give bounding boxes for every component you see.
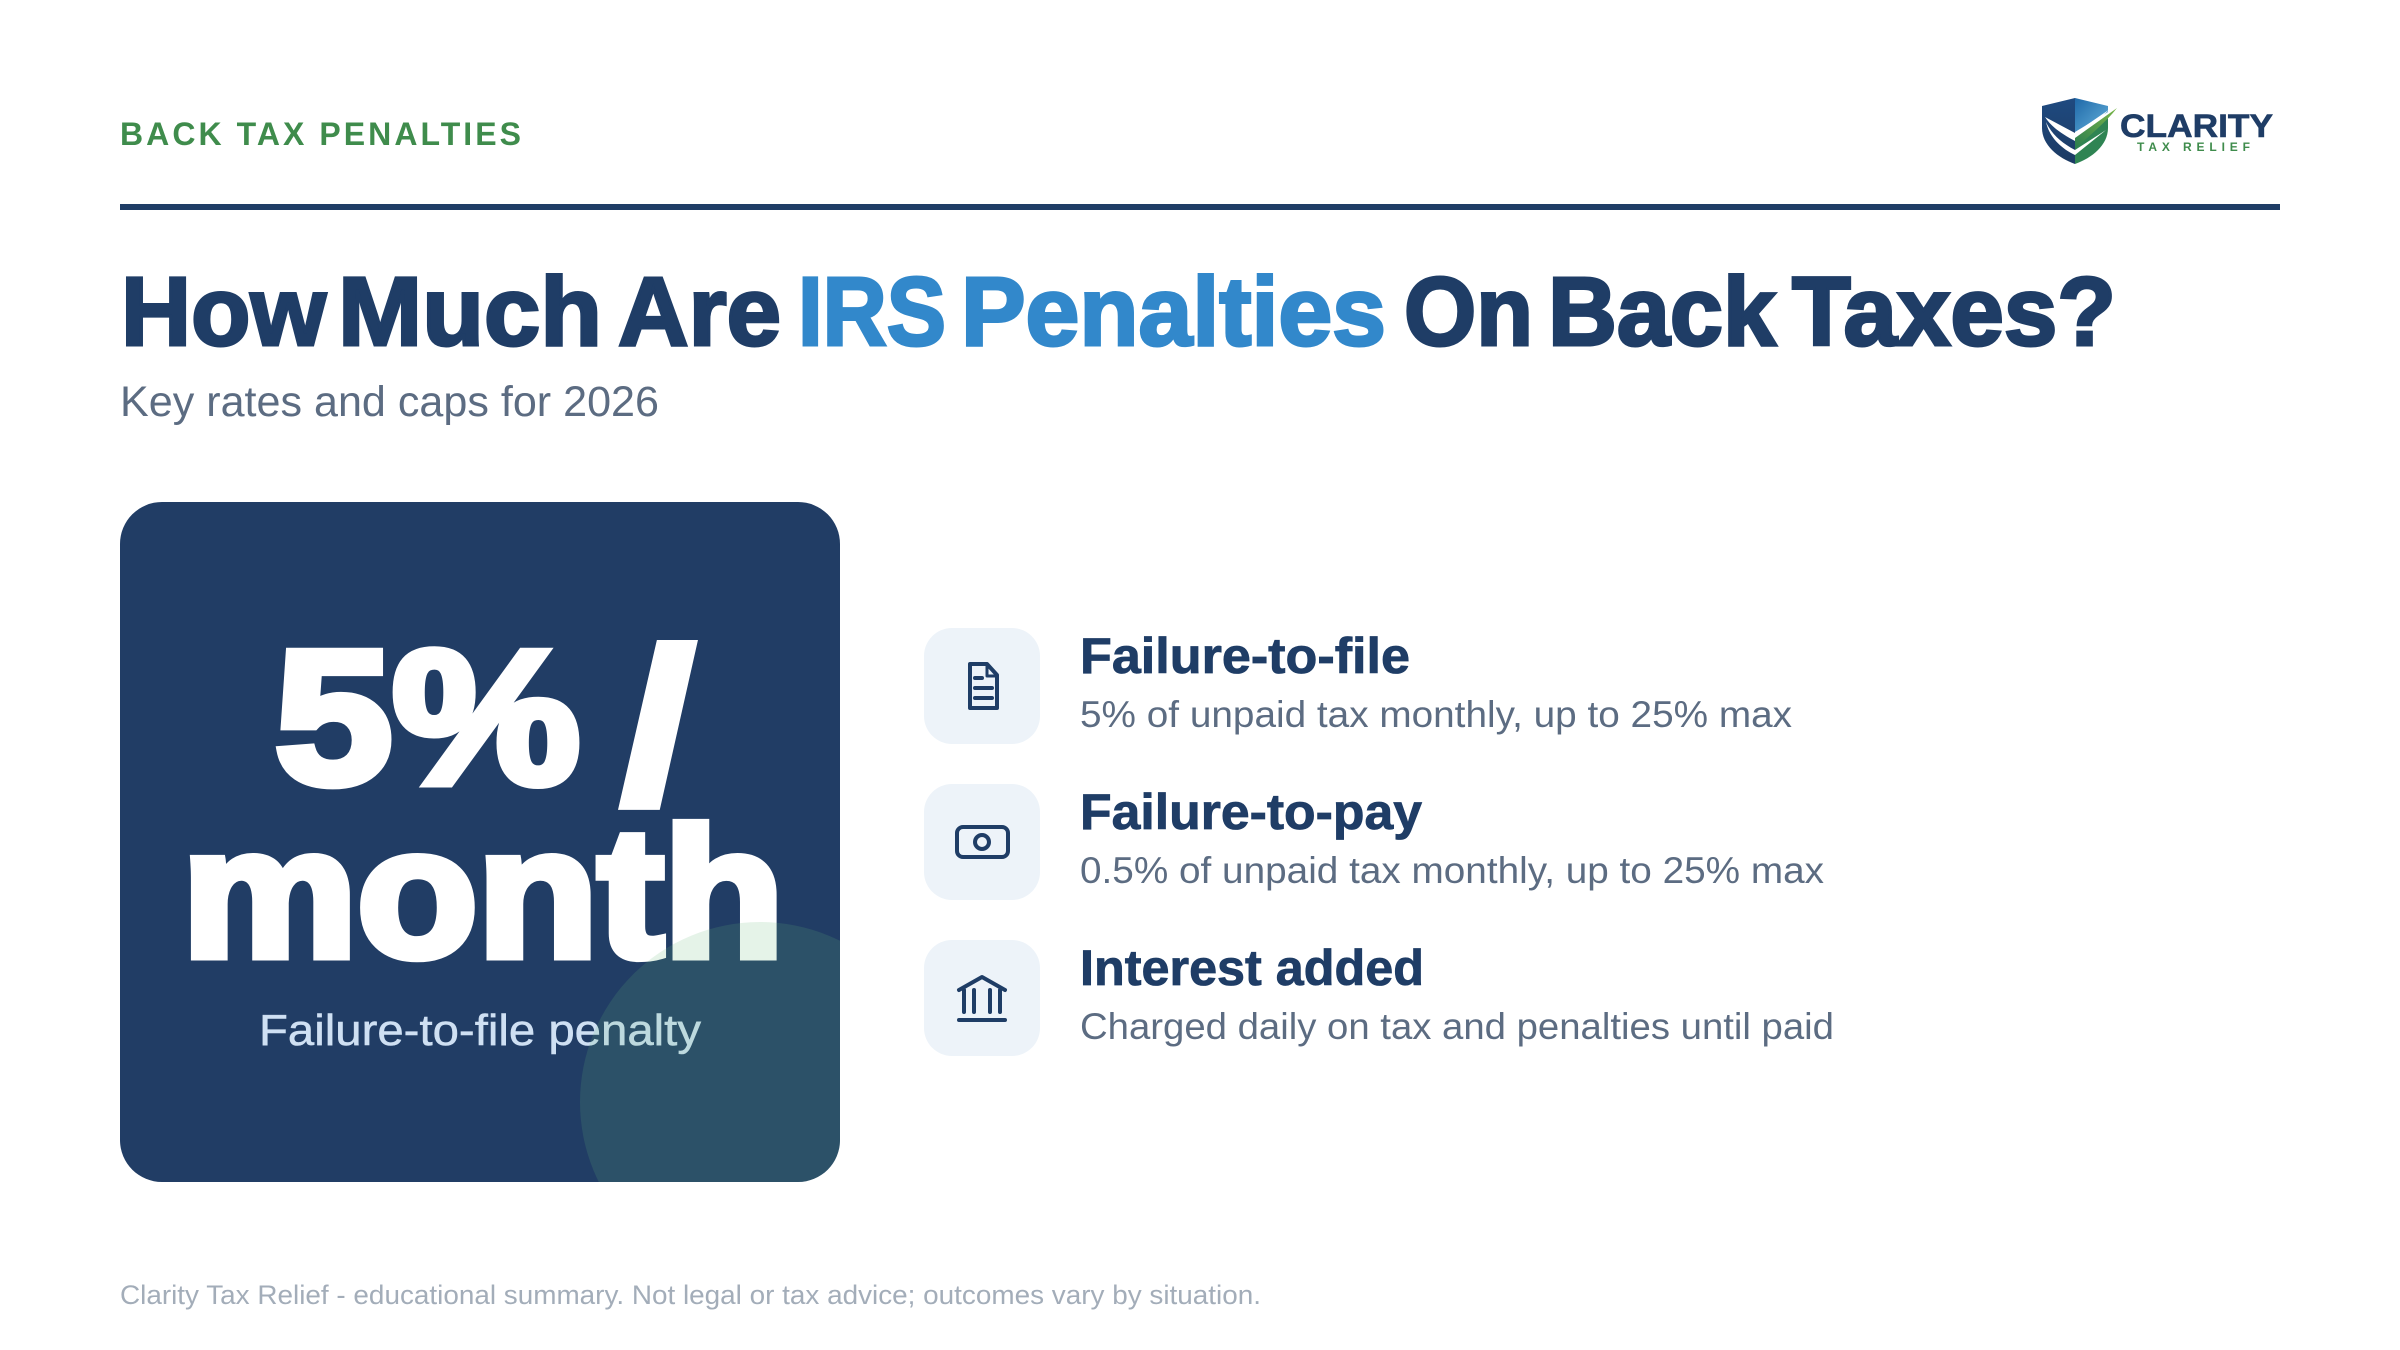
icon: document [924,628,1040,744]
icon: shield [2042,98,2117,164]
title: Taxes? [1792,257,2116,366]
icon: banknote [924,784,1040,900]
big stat: 5% / month [182,605,784,995]
caption: Failure-to-file penalty [259,1006,701,1055]
logo wordmark: CLARITY [2120,108,2273,144]
footer disclaimer: Clarity Tax Relief - educational summary. Not legal or tax advice; outcomes vary by situation. [120,1280,1261,1310]
title: How [121,257,327,366]
title [121,257,2116,366]
logo tagline: TAX RELIEF [2137,140,2250,154]
decorative circle [580,922,840,1182]
description: 0.5% of unpaid tax monthly, up to 25% max [1080,850,1825,891]
list item: failure-to-pay [924,784,1825,900]
description: Charged daily on tax and penalties until paid [1080,1006,1834,1047]
heading: Failure-to-pay [1080,784,1422,840]
big stat: 5% / month: / [622,605,694,847]
description: 5% of unpaid tax monthly, up to 25% max [1080,694,1793,735]
list item: failure-to-file [924,628,1793,744]
eyebrow heading: BACK TAX PENALTIES [120,116,521,152]
title: Much [338,257,602,366]
panel: headline stat [120,502,840,1182]
icon: bank [924,940,1040,1056]
logo: Clarity Tax Relief [2042,98,2273,164]
title: Back [1548,257,1777,366]
big stat: 5% / month: 5% [275,612,580,824]
heading: Failure-to-file [1080,628,1410,684]
heading: Interest added [1080,940,1424,996]
list item: interest added [924,940,1834,1056]
title: Are [618,257,781,366]
title: On [1404,257,1533,366]
subtitle: Key rates and caps for 2026 [120,378,659,426]
title: IRS [798,257,946,366]
title: Penalties [961,257,1386,366]
big stat: 5% / month: month [182,790,784,995]
